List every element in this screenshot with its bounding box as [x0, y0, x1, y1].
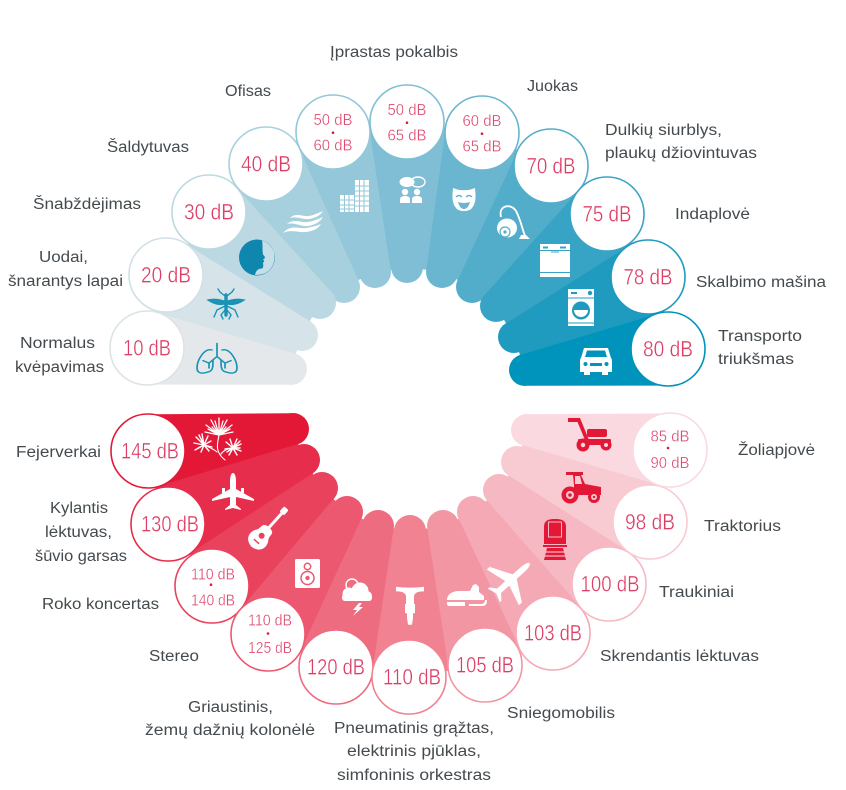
- label: normal conversation: Įprastas pokalbis: [330, 44, 458, 61]
- fan of loud sounds (red wedges): [142, 413, 675, 678]
- badge: 60–65 dB: [445, 96, 519, 170]
- icon: thunder cloud: [342, 579, 372, 616]
- label: traffic noise: triukšmas: [718, 351, 794, 368]
- icon: fireworks: [194, 418, 241, 460]
- badge: 78 dB: [611, 240, 685, 314]
- badge: 110–140 dB: [175, 549, 249, 623]
- icon: lungs: [197, 343, 237, 373]
- label: jackhammer, power saw, symphony orchestra: elektrinis pjūklas,: [347, 743, 481, 760]
- badge: 78 dB: 78 dB: [624, 264, 672, 290]
- label: tractor: Traktorius: [704, 518, 781, 535]
- badge: 100 dB: 100 dB: [580, 572, 640, 596]
- badge: 105 dB: 105 dB: [456, 652, 514, 678]
- label: thunder, subwoofer: [145, 699, 315, 739]
- badge: 60–65 dB: 60 dB: [462, 113, 502, 130]
- badge: 40 dB: 40 dB: [241, 152, 291, 176]
- badge: 50–65 dB: 50 dB: [388, 102, 426, 119]
- icon: tractor: [562, 472, 601, 504]
- label: mosquitoes, rustling leaves: šnarantys lapai: [8, 273, 123, 290]
- icon: jackhammer: [396, 587, 424, 625]
- badge: 145 dB: 145 dB: [121, 438, 179, 464]
- label: office: Ofisas: [225, 83, 271, 100]
- badge: 120 dB: 120 dB: [307, 654, 365, 680]
- badge: 100 dB: [572, 547, 646, 621]
- badge: 10 dB: 10 dB: [123, 336, 171, 360]
- badge: 110–125 dB: 110 dB: [248, 612, 292, 630]
- icon: dishwasher: [540, 244, 570, 277]
- badge: 50–60 dB: [296, 95, 370, 169]
- badge: 103 dB: [516, 596, 590, 670]
- label: thunder, subwoofer: žemų dažnių kolonėlė: [145, 722, 315, 739]
- label: snowmobile: Sniegomobilis: [507, 705, 615, 722]
- badge: 130 dB: [131, 487, 205, 561]
- icon: vacuum cleaner: [497, 206, 530, 239]
- icon: car: [580, 348, 612, 375]
- badge: 10 dB: [110, 311, 184, 385]
- label: thunder, subwoofer: Griaustinis,: [188, 699, 273, 716]
- label: traffic noise: Transporto: [718, 328, 802, 345]
- label: washing machine: Skalbimo mašina: [696, 274, 826, 291]
- icon: electric guitar: [244, 501, 294, 554]
- badge: 50–60 dB: 50 dB: [314, 112, 352, 129]
- badge: 75 dB: 75 dB: [582, 202, 632, 226]
- label: aircraft taking off, gunshot: lėktuvas,: [45, 524, 112, 541]
- label: refrigerator: Šaldytuvas: [107, 139, 189, 156]
- badge: 105 dB: [448, 628, 522, 702]
- badge: 103 dB: 103 dB: [524, 620, 582, 646]
- badge: 70 dB: 70 dB: [526, 154, 576, 178]
- label: jackhammer, power saw, symphony orchestra: [334, 720, 494, 784]
- label: jackhammer, power saw, symphony orchestra: Pneumatinis grąžtas,: [334, 720, 494, 737]
- icon: office buildings: [340, 180, 369, 212]
- icon: washing machine: [568, 289, 594, 326]
- fan of quiet sounds (blue wedges): [142, 121, 673, 386]
- badge: 70 dB: [514, 129, 588, 203]
- icon: mosquito: [208, 289, 244, 319]
- badge: 50–65 dB: 65 dB: [388, 128, 426, 144]
- badge: 40 dB: [229, 127, 303, 201]
- icon: stereo speaker: [295, 559, 320, 588]
- badge: 98 dB: 98 dB: [625, 510, 675, 534]
- badge: 50–60 dB: 60 dB: [314, 138, 352, 154]
- badge: 85–90 dB: [633, 413, 707, 487]
- badge: 120 dB: [299, 630, 373, 704]
- icon: two people talking: [400, 177, 425, 203]
- badge: 110–140 dB: 110 dB: [191, 566, 235, 584]
- label: fireworks: Fejerverkai: [16, 444, 101, 461]
- label: whisper: Šnabždėjimas: [33, 196, 141, 213]
- label: normal breathing: [15, 335, 104, 376]
- badge: 110 dB: [372, 640, 446, 714]
- badge: 110–125 dB: [231, 597, 305, 671]
- label: flying airplane: Skrendantis lėktuvas: [600, 648, 759, 665]
- badge: 110 dB: 110 dB: [383, 664, 441, 690]
- badge: 145 dB: [111, 414, 185, 488]
- badge: 75 dB: [570, 177, 644, 251]
- badge: 80 dB: [631, 312, 705, 386]
- icon: whisper profile: [239, 240, 275, 276]
- label: trains: Traukiniai: [659, 584, 734, 601]
- badge: 130 dB: 130 dB: [141, 512, 199, 536]
- label: lawn mower: Žoliapjovė: [738, 442, 815, 459]
- label: aircraft taking off, gunshot: šūvio garsas: [35, 548, 127, 565]
- label: jackhammer, power saw, symphony orchestra: simfoninis orkestras: [337, 767, 491, 784]
- label: laughter: Juokas: [527, 78, 578, 95]
- badge: 60–65 dB: 65 dB: [462, 138, 502, 156]
- icon: lawn mower: [568, 418, 612, 452]
- badge: 110–125 dB: 125 dB: [248, 640, 292, 657]
- label: stereo: Stereo: [149, 648, 199, 665]
- badge: 85–90 dB: 90 dB: [650, 455, 690, 472]
- label: normal breathing: Normalus: [20, 335, 95, 352]
- label: vacuum cleaner, hair dryer: [605, 122, 757, 162]
- badge: 30 dB: 30 dB: [184, 200, 234, 224]
- badge: 20 dB: 20 dB: [141, 262, 191, 288]
- label: aircraft taking off, gunshot: Kylantis: [50, 500, 108, 517]
- icon: flying airplane: [478, 545, 546, 613]
- icon: refrigerator airflow waves: [283, 211, 323, 233]
- label: vacuum cleaner, hair dryer: plaukų džiovintuvas: [605, 145, 757, 162]
- icon: snowmobile: [447, 584, 487, 606]
- label: mosquitoes, rustling leaves: Uodai,: [39, 249, 88, 266]
- label: dishwasher: Indaplovė: [675, 206, 750, 223]
- label: rock concert: Roko koncertas: [42, 596, 159, 613]
- badge: 30 dB: [172, 175, 246, 249]
- decibel value badges: [110, 85, 707, 714]
- badge: 80 dB: 80 dB: [643, 336, 693, 362]
- icon: train: [543, 519, 567, 560]
- label: vacuum cleaner, hair dryer: Dulkių siurblys,: [605, 122, 722, 139]
- badge: 98 dB: [613, 485, 687, 559]
- label: traffic noise: [718, 328, 802, 368]
- label: mosquitoes, rustling leaves: [8, 249, 123, 290]
- icon: airplane taking off: [212, 473, 254, 510]
- label: aircraft taking off, gunshot: [35, 500, 127, 565]
- label: normal breathing: kvėpavimas: [15, 359, 104, 376]
- badge: 50–65 dB: [370, 85, 444, 159]
- badge: 20 dB: [129, 238, 203, 312]
- badge: 110–140 dB: 140 dB: [191, 592, 235, 610]
- badge: 85–90 dB: 85 dB: [650, 428, 690, 446]
- icon: theatre mask: [452, 188, 476, 211]
